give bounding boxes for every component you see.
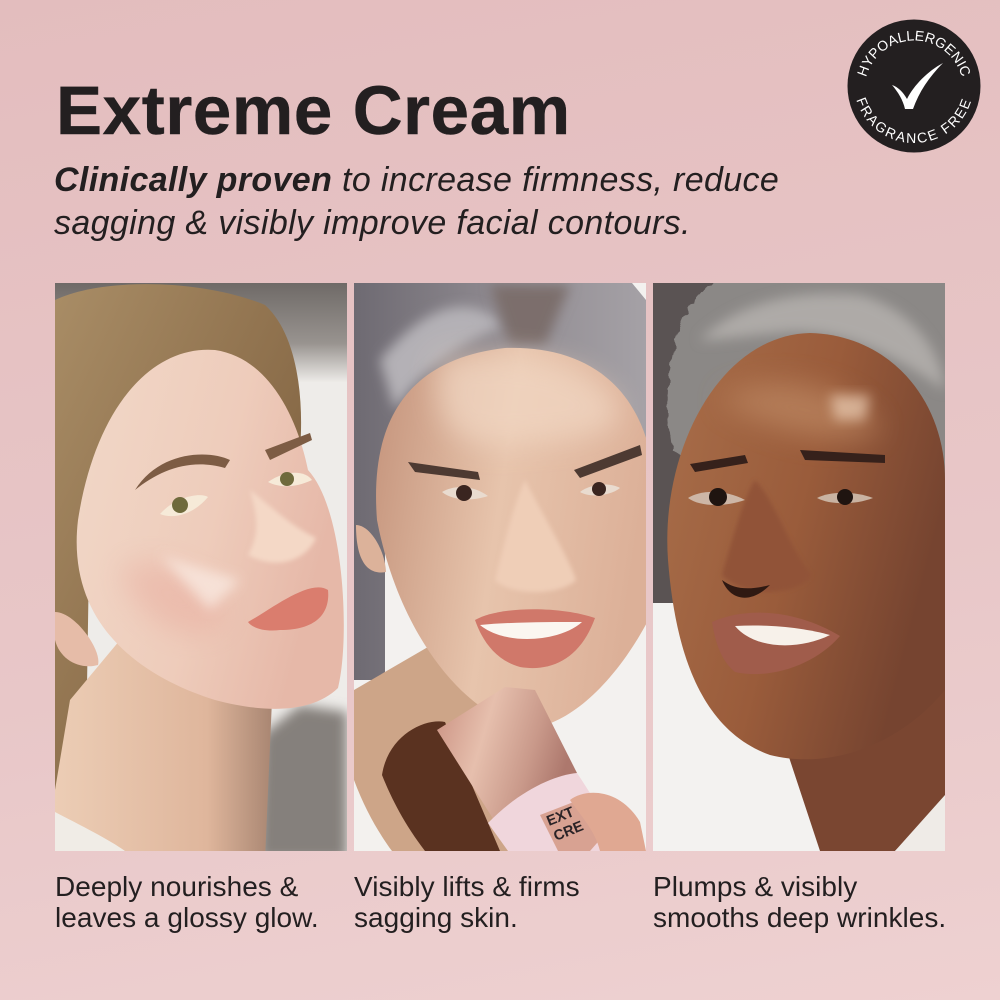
photo: woman with curly grey hair bbox=[653, 283, 945, 851]
caption: lifts and firms: sagging skin. bbox=[354, 902, 518, 932]
title: Extreme Cream bbox=[56, 72, 571, 149]
caption: lifts and firms bbox=[354, 871, 580, 933]
product bottle: CRE bbox=[552, 818, 586, 845]
caption: smooths wrinkles bbox=[653, 871, 946, 933]
face bbox=[77, 350, 344, 709]
badge: hypoallergenic, fragrance free bbox=[848, 20, 980, 152]
lips bbox=[248, 587, 328, 631]
caption: lifts and firms: Visibly lifts & firms bbox=[354, 871, 580, 902]
grey hair bbox=[354, 283, 646, 680]
blonde hair bbox=[55, 284, 301, 810]
curly grey hair bbox=[668, 270, 960, 500]
photo: woman with grey hair holding product bbox=[354, 283, 646, 851]
subtitle: sagging & visibly improve facial contours. bbox=[54, 204, 691, 242]
face bbox=[667, 333, 945, 759]
caption: glossy glow: Deeply nourishes & bbox=[55, 871, 298, 902]
product bottle: EXT bbox=[545, 804, 577, 830]
smile bbox=[712, 613, 840, 674]
subtitle: Clinically proven to increase firmness, reduce bbox=[54, 161, 779, 199]
badge: hypoallergenic, fragrance free: FRAGRANCE FREE bbox=[856, 97, 971, 143]
product bottle bbox=[437, 687, 646, 851]
subtitle bbox=[54, 161, 779, 242]
caption: smooths wrinkles: smooths deep wrinkles. bbox=[653, 902, 946, 932]
caption: smooths wrinkles: Plumps & visibly bbox=[653, 871, 857, 902]
badge: hypoallergenic, fragrance free: HYPOALLERGENIC bbox=[857, 30, 970, 76]
caption: glossy glow bbox=[55, 871, 319, 933]
face bbox=[376, 348, 656, 728]
photo: woman with blonde hair bbox=[55, 283, 347, 851]
caption: glossy glow: leaves a glossy glow. bbox=[55, 902, 319, 932]
